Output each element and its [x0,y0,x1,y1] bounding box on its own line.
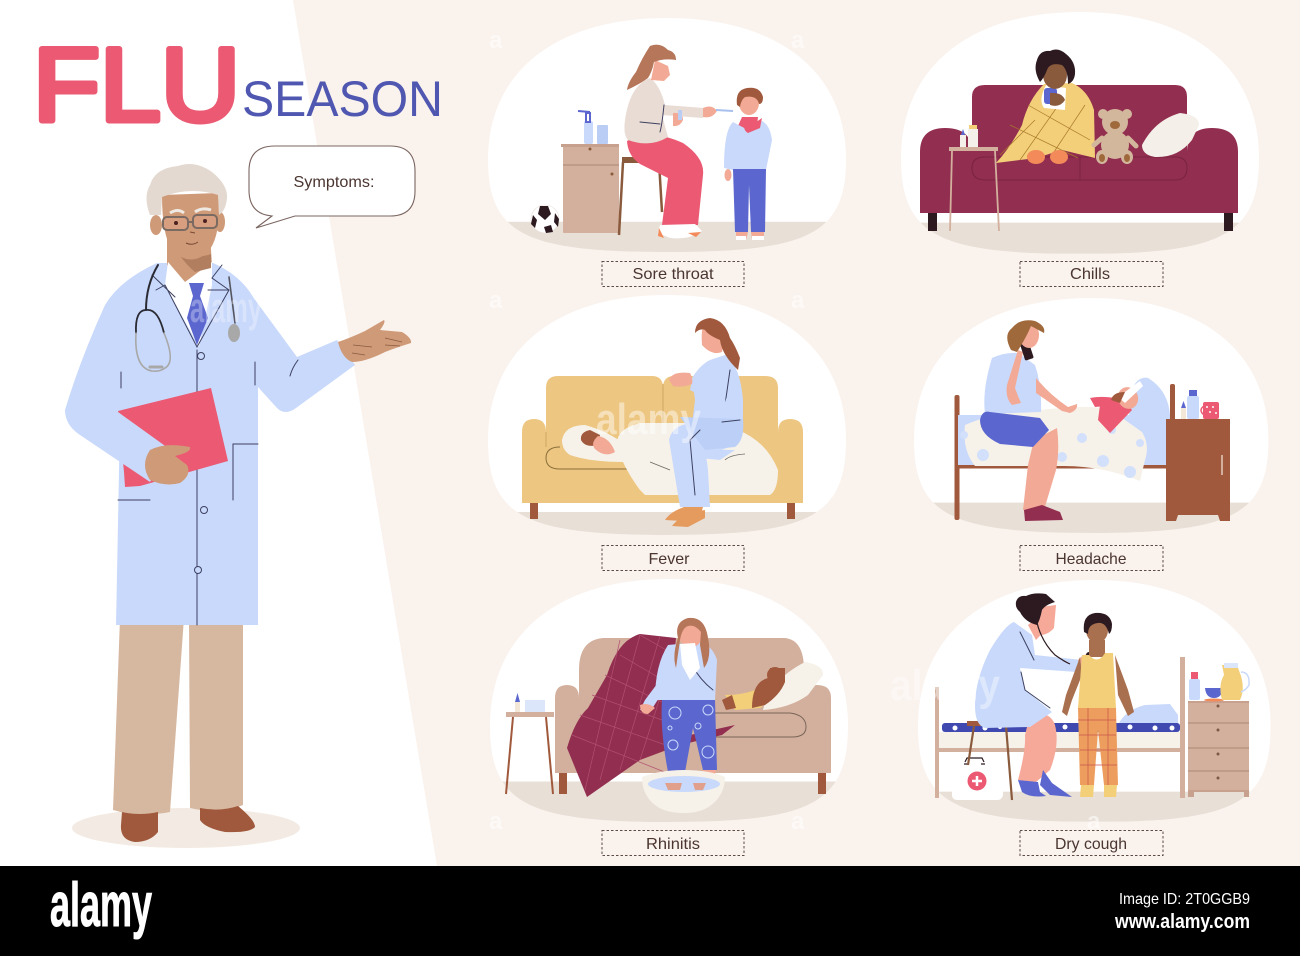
speech bubble: symptoms [249,146,415,228]
image id: Image ID: 2T0GGB9 [1119,891,1250,908]
panel background [490,579,848,822]
label: Sore throat: Sore throat [632,266,714,283]
watermarks: a [1087,808,1101,835]
clipboard folder [118,388,228,487]
watermarks: alamy [890,661,1000,710]
scene: child on red sofa [920,50,1238,231]
label: Fever [602,546,744,570]
panel: dry cough [918,580,1271,856]
label: Headache [1020,546,1163,570]
watermarks: alamy [190,284,262,331]
panel background [918,580,1271,822]
watermarks: a [791,27,805,54]
watermarks: a [791,808,805,835]
panel: headache [914,298,1268,570]
panel: chills [901,12,1259,286]
scene: girl with tissue and foot bath [506,618,831,813]
watermarks: a [489,287,503,314]
panel background [488,18,846,252]
website: www.alamy.com [1114,911,1250,933]
scene: doctor examining boy [935,593,1249,800]
label: Dry cough: Dry cough [1055,836,1127,853]
footer bar [0,866,1300,956]
label: Chills [1020,262,1163,286]
panel background [901,12,1259,254]
scene: mother on phone by sick child in bed [954,320,1230,521]
title [33,28,443,144]
watermarks [190,27,1101,835]
panel: fever [488,295,846,570]
watermarks: alamy [596,395,701,444]
stethoscope [136,265,240,371]
panel background [488,295,846,535]
label: Fever: Fever [648,551,690,568]
scene: mother with sleeping child [522,318,803,527]
watermarks: a [791,287,805,314]
footer logo: alamy [50,871,152,940]
panel: rhinitis [490,579,848,856]
label: Headache: Headache [1056,551,1127,568]
panel background [914,298,1268,533]
label: Sore throat [602,262,744,286]
title word: FLU: FLU [33,28,240,144]
watermarks: a [489,27,503,54]
label: Rhinitis [602,830,744,856]
doctor figure [65,164,411,848]
label: Rhinitis: Rhinitis [646,836,700,853]
panel: sore throat [488,18,846,286]
head [150,215,162,235]
speech bubble: symptoms: Symptoms: [294,174,374,191]
label: Dry cough [1020,830,1163,856]
label: Chills: Chills [1070,266,1110,283]
title word: SEASON: SEASON [242,71,443,127]
watermarks: a [489,808,503,835]
scene: mother treating boy [531,45,772,240]
